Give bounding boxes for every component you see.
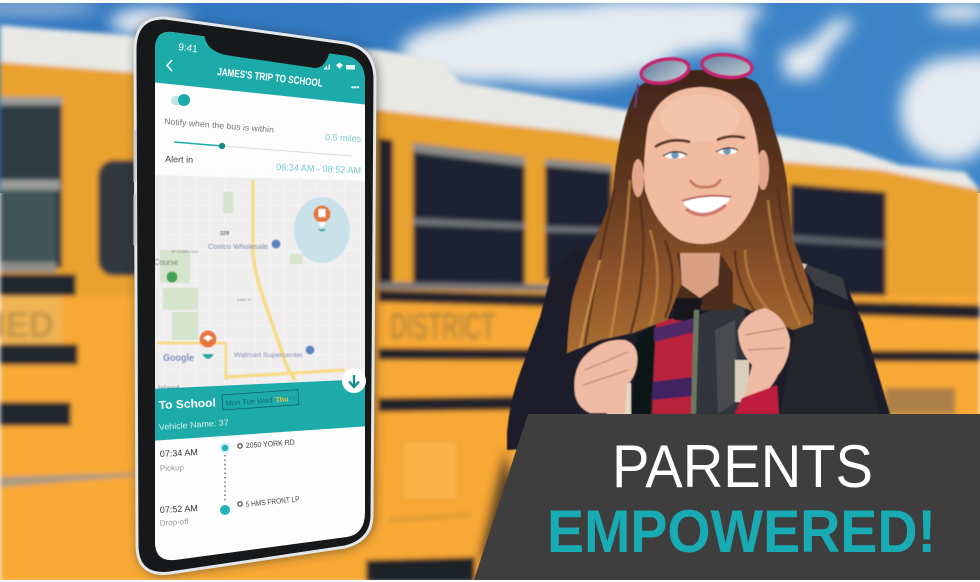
pickup label: Pickup [160, 463, 185, 473]
left stripes [0, 274, 76, 296]
map: Course [154, 258, 179, 267]
notify distance: 0.5 miles [325, 132, 362, 144]
map base [150, 175, 370, 395]
pin: golf [166, 272, 178, 282]
to school label: To School [159, 398, 216, 412]
banner shadow on bus [478, 450, 520, 565]
notify label: Notify when the bus is within [164, 116, 275, 135]
teal header [155, 32, 365, 104]
faded district lettering: DISTRICT [390, 306, 495, 348]
dropoff address: 5 HMS FRONT LP [245, 494, 300, 509]
pickup time: 07:34 AM [160, 447, 198, 459]
eyes [663, 147, 738, 159]
bottom dark shape [366, 557, 475, 582]
phone body [135, 18, 375, 573]
top white strip [0, 0, 980, 3]
pin: bus [200, 330, 216, 359]
face [644, 87, 759, 244]
forehead highlight [660, 94, 740, 142]
ears [632, 150, 769, 197]
address pins [238, 444, 242, 506]
toggle [171, 94, 190, 106]
header title: JAMES'S TRIP TO SCHOOL [217, 66, 324, 90]
hair behind neck [672, 220, 736, 310]
phone shadow [135, 18, 378, 575]
status icons [324, 62, 355, 70]
smile [682, 196, 731, 215]
slider [174, 142, 352, 156]
map: 229 [220, 231, 229, 237]
shirt [652, 317, 695, 414]
map street grid [150, 175, 370, 395]
side buttons [134, 130, 136, 245]
map [150, 175, 370, 395]
weekday selector [222, 390, 299, 410]
clouds [0, 0, 980, 162]
hair strands [580, 180, 812, 348]
cuffs [735, 385, 779, 414]
right hand [738, 308, 790, 405]
dropoff time: 07:52 AM [160, 503, 198, 515]
map: Elder St [237, 297, 252, 302]
vehicle name: Vehicle Name: 37 [158, 417, 229, 432]
map labels: Costco Wholesale [208, 244, 268, 251]
pin: school [314, 206, 330, 232]
hair [560, 60, 820, 360]
status time: 9:41 [178, 42, 199, 55]
phone [135, 18, 378, 575]
map parks [160, 192, 303, 340]
alert window: 06:34 AM - 08:52 AM [276, 162, 361, 177]
weekday selector: Mon Tue Wed [225, 396, 273, 408]
screen [150, 25, 370, 565]
windows [378, 138, 393, 282]
window lower sills [378, 282, 640, 292]
dropoff label: Drop-off [160, 517, 190, 528]
google logo: Google [163, 353, 194, 364]
heading: empowered: EMPOWERED! [547, 498, 936, 565]
jacket [507, 247, 890, 450]
sunglasses [635, 52, 753, 108]
back chevron [167, 60, 172, 71]
pickup address: 2050 YORK RD [246, 438, 295, 450]
nose [690, 179, 721, 187]
dropoff marker [220, 505, 230, 515]
download button [342, 369, 366, 393]
left window [0, 100, 62, 268]
girl with backpack [507, 52, 890, 450]
notch [204, 34, 330, 68]
weekday selector: Thu [275, 394, 289, 404]
screen white base [150, 25, 370, 565]
map: Island [158, 384, 179, 393]
bus roof [0, 22, 980, 194]
weekday selector: Fri [288, 394, 298, 403]
sky [0, 3, 980, 193]
route band [150, 379, 370, 441]
pickup marker [220, 442, 230, 454]
backpack straps [607, 383, 631, 415]
route dots [224, 455, 226, 502]
pin: walmart [306, 346, 314, 354]
bus yellow side [0, 59, 980, 300]
mirror [95, 157, 134, 279]
map: Walmart Supercenter [234, 352, 304, 359]
eyebrows [655, 140, 690, 147]
alert label: Alert in [165, 154, 193, 165]
menu dots: ••• [351, 83, 360, 92]
bus dark stripes [378, 290, 980, 319]
neck [678, 225, 722, 298]
bottom white strip [0, 580, 980, 582]
banner background [474, 414, 980, 580]
heading: parents: PARENTS [612, 433, 873, 500]
left hand [574, 340, 638, 413]
service radius [294, 197, 350, 263]
pin: costco [272, 240, 280, 248]
banner [474, 414, 980, 580]
roads [157, 180, 345, 380]
map: W Gustin Ave [171, 249, 199, 254]
